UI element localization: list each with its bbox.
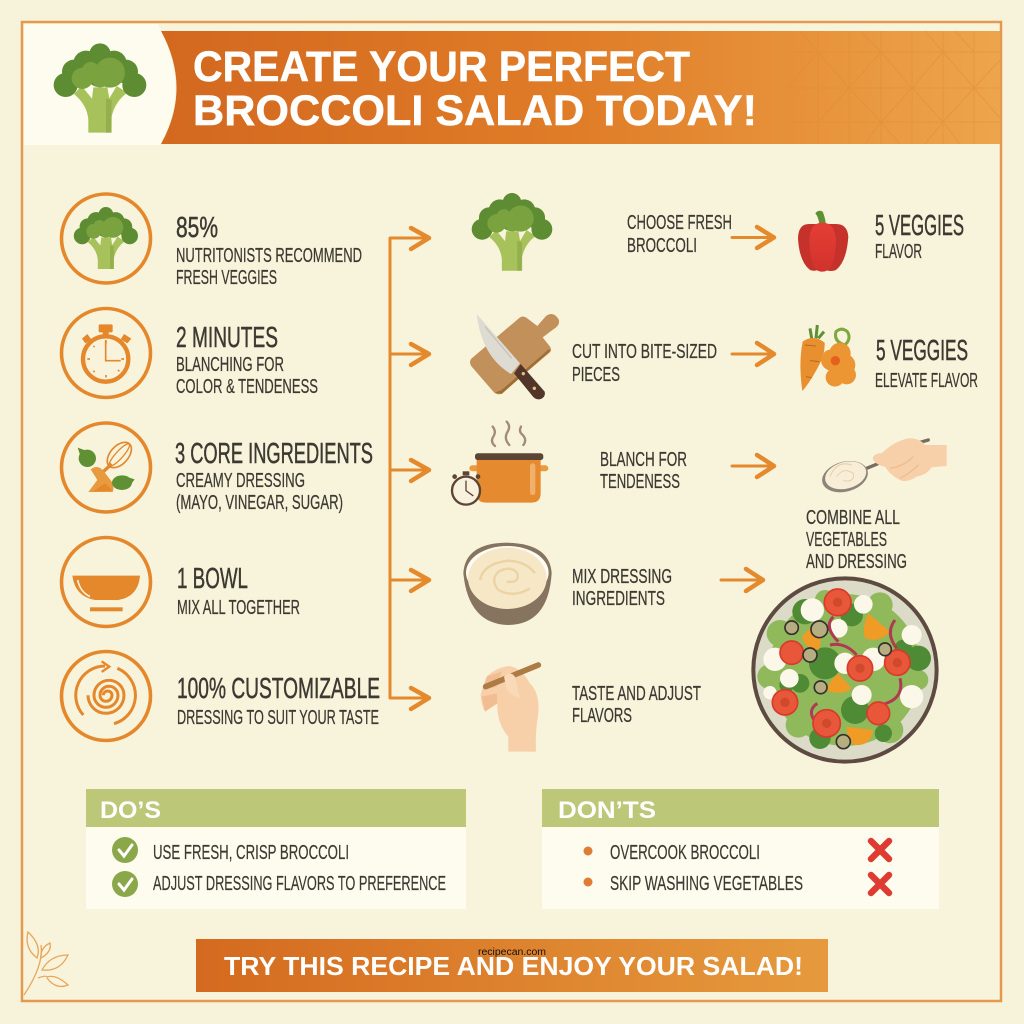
olives (785, 621, 891, 749)
stat: 1 bowl (62, 538, 300, 626)
banner geometric pattern (787, 31, 1000, 144)
plate (753, 578, 937, 762)
step text: TASTE AND ADJUST (572, 683, 701, 705)
text: 5 veggies flavor (875, 210, 964, 263)
salad bowl (753, 578, 937, 762)
header banner (24, 24, 1000, 145)
step text (600, 449, 687, 493)
stat: 85%: NUTRITONISTS RECOMMEND (176, 245, 362, 267)
stat: 3 core ingredients (62, 423, 373, 514)
stat: 2 minutes (62, 308, 318, 398)
arrow (732, 227, 774, 248)
text: combine all (806, 507, 907, 573)
step text (572, 341, 717, 386)
stat: 85%: 85% (176, 212, 218, 244)
step text: FLAVORS (572, 705, 632, 727)
footer call to action: TRY THIS RECIPE AND ENJOY YOUR SALAD! (224, 951, 803, 981)
do's heading: DO’S (100, 797, 161, 824)
stat: 85% (62, 194, 362, 289)
step text: BLANCH FOR (600, 449, 687, 471)
icon: knife and cutting board (470, 314, 559, 399)
stat: 3 core ingredients: CREAMY DRESSING (176, 470, 305, 492)
stat: 1 bowl: 1 BOWL (177, 563, 248, 595)
icon: pot with stopwatch (452, 422, 548, 505)
stat: 2 minutes: COLOR & TENDENESS (176, 376, 318, 398)
step text: TENDENESS (600, 471, 680, 493)
arrow (732, 343, 774, 365)
panel: don'ts (542, 789, 939, 909)
don't item 1: OVERCOOK BROCCOLI (610, 842, 760, 864)
step text: MIX DRESSING (572, 566, 672, 588)
step 3: blanch (452, 422, 947, 505)
cheese (763, 595, 923, 708)
check item 1 (112, 837, 349, 864)
arrow (732, 455, 774, 477)
stat: 1 bowl: MIX ALL TOGETHER (177, 597, 300, 619)
lettuce (757, 590, 928, 746)
stat: 2 minutes: BLANCHING FOR (176, 354, 284, 376)
watermark: recipecan.com (478, 947, 546, 958)
don't item 2: SKIP WASHING VEGETABLES (610, 873, 803, 895)
stat: 85%: FRESH VEGGIES (176, 267, 277, 289)
icon: hand with spoon (819, 438, 947, 497)
step text: PIECES (572, 364, 620, 386)
icon: broccoli logo (54, 43, 146, 133)
text: combine all: COMBINE ALL (806, 507, 900, 529)
icon: leaf sprig (24, 932, 68, 995)
step text: CUT INTO BITE-SIZED (572, 341, 717, 363)
banner band (161, 31, 1000, 144)
icon: carrot and squash (800, 325, 856, 391)
orange wedges (802, 613, 890, 745)
stat: 100% customizable: 100% CUSTOMIZABLE (177, 673, 380, 705)
stat: 2 minutes: 2 MINUTES (176, 322, 278, 354)
step text: CHOOSE FRESH (627, 212, 732, 234)
tomatoes (772, 589, 910, 737)
step text (572, 566, 672, 610)
icon: hand with breadstick (481, 665, 539, 752)
icon: bowl of dressing (463, 543, 552, 625)
text: combine all: VEGETABLES (806, 529, 887, 551)
arrow (721, 569, 763, 591)
stat: 3 core ingredients: (MAYO, VINEGAR, SUGAR) (176, 492, 343, 514)
red onion (811, 617, 901, 725)
step text (627, 212, 732, 257)
title: CREATE YOUR PERFECT (193, 43, 690, 91)
arrow: connector tree (390, 228, 429, 709)
step 5: taste and adjust (481, 665, 701, 752)
check item 1: USE FRESH, CRISP BROCCOLI (153, 842, 349, 864)
panel: do's (86, 789, 466, 909)
text: 5 veggies flavor: FLAVOR (875, 241, 922, 263)
icon: red pepper (798, 211, 848, 272)
step text: BROCCOLI (627, 235, 697, 257)
step 1: choose broccoli (472, 193, 964, 272)
stat: 3 core ingredients: 3 CORE INGREDIENTS (175, 438, 373, 470)
stat: 100% customizable (62, 652, 380, 740)
check item 2: ADJUST DRESSING FLAVORS TO PREFERENCE (153, 873, 446, 895)
icon: broccoli (472, 193, 552, 271)
step 2: cut into pieces (470, 314, 978, 399)
check item 2 (112, 871, 446, 897)
logo background panel (24, 24, 176, 145)
stats column (62, 194, 380, 740)
step text (572, 683, 701, 727)
stat: 100% customizable: DRESSING TO SUIT YOUR TASTE (177, 707, 379, 729)
text: 5 veggies elevate flavor (875, 335, 978, 392)
dark greens (779, 599, 931, 749)
footer call to action (196, 939, 828, 992)
tomato centres (780, 598, 902, 728)
text: combine all: AND DRESSING (806, 551, 907, 573)
title: BROCCOLI SALAD TODAY! (193, 87, 757, 135)
don'ts heading: DON’TS (558, 797, 656, 824)
title (193, 43, 757, 135)
step text: INGREDIENTS (572, 588, 665, 610)
step 4: mix dressing (463, 543, 763, 625)
